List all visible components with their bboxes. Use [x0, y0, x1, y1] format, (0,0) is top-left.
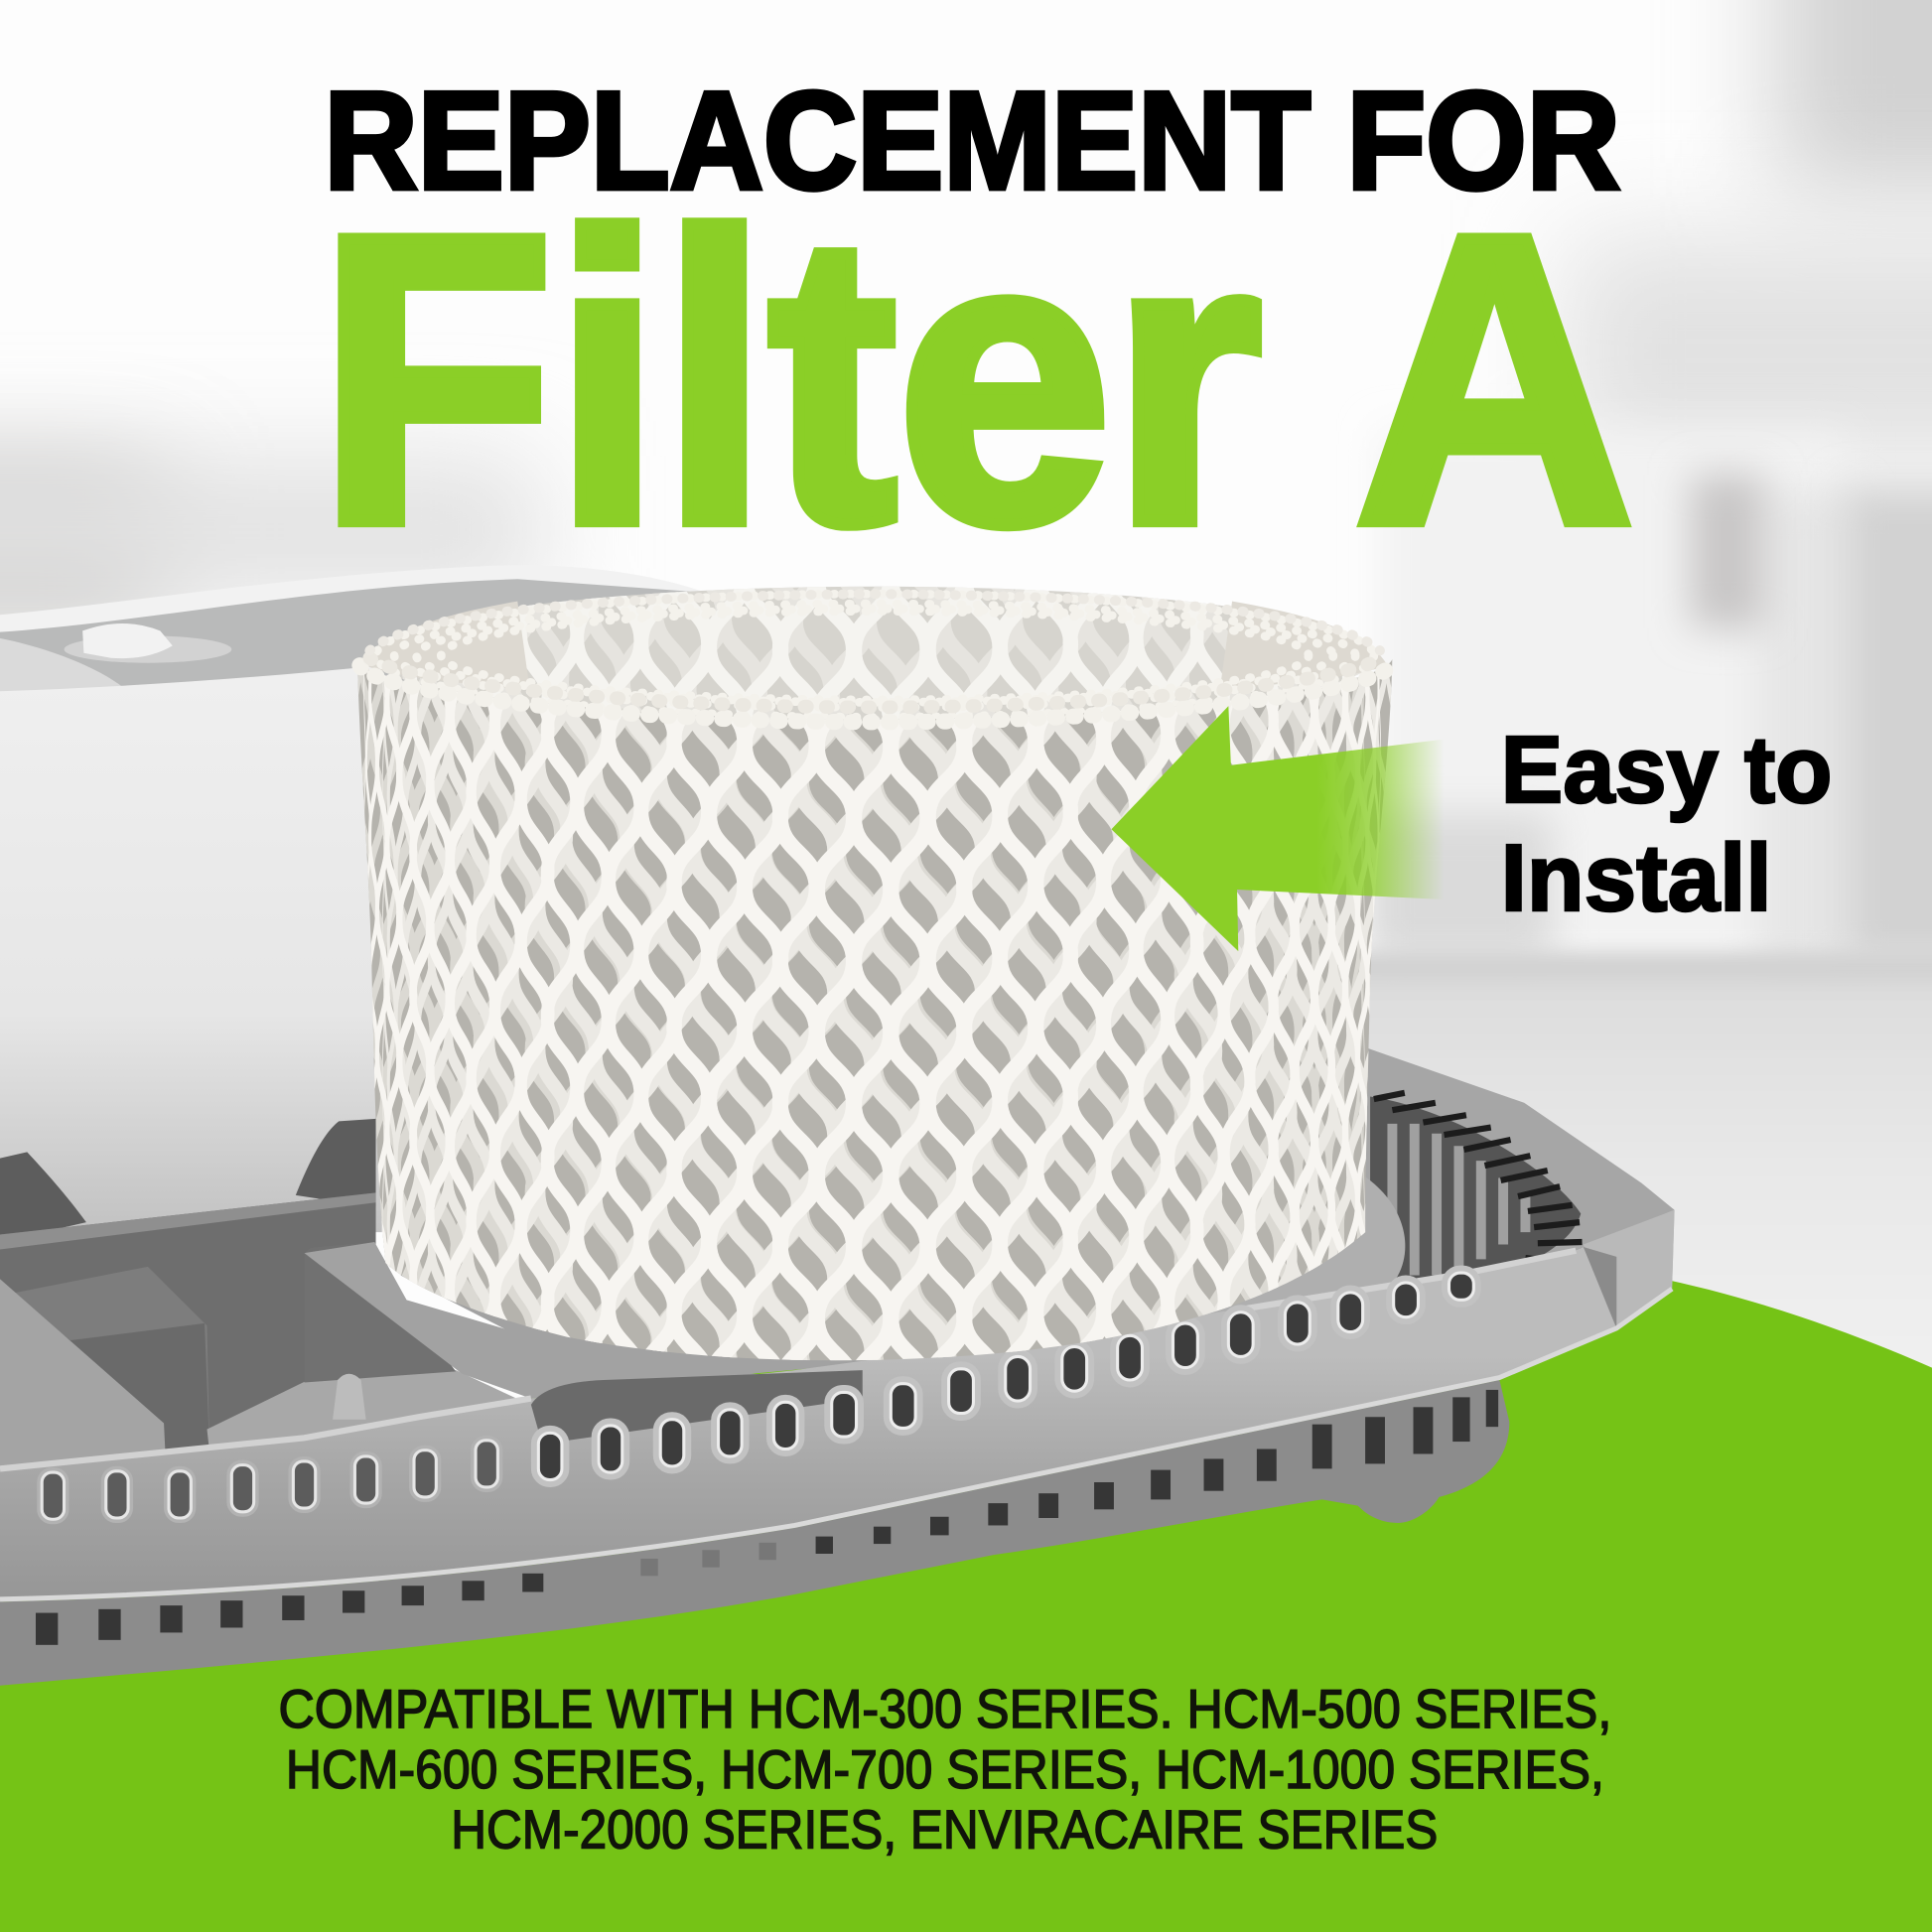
front jagged rim upper row — [369, 658, 1380, 707]
lower skirt — [0, 1380, 1509, 1686]
corner ribbed recess — [1370, 1097, 1581, 1284]
upper slots right loops — [538, 1273, 1473, 1480]
recess vertical ribs — [1392, 1124, 1525, 1276]
tray rear wall — [0, 1192, 376, 1466]
upper slots left loops — [42, 1441, 497, 1519]
post platform — [207, 1370, 530, 1451]
title line 1: REPLACEMENT FOR — [324, 63, 1620, 218]
humidifier body — [0, 565, 702, 1232]
compatibility text: HCM-600 SERIES, HCM-700 SERIES, HCM-1000 SERIES, — [286, 1739, 1604, 1800]
fuzzy ring texture — [376, 594, 1374, 717]
callout: easy to install: Easy to — [1501, 717, 1832, 823]
light wedge — [0, 1279, 167, 1484]
grey tray base — [0, 1046, 1675, 1686]
lower slots row — [36, 1390, 1498, 1645]
back wall — [377, 586, 1361, 720]
title line 2: Filter A — [318, 150, 1634, 609]
under filter fill — [400, 1220, 1355, 1386]
front jagged rim — [359, 665, 1390, 722]
lid knob ring — [65, 635, 231, 663]
lid lip — [0, 565, 702, 635]
left top fuzzy ring — [364, 602, 530, 690]
green curved ground — [0, 1269, 1932, 1932]
recess rim dashes — [1374, 1093, 1583, 1283]
corner wedge — [1584, 1210, 1675, 1330]
rim groove highlight — [0, 1289, 1672, 1599]
back tabs — [0, 1119, 376, 1242]
upper slots left — [42, 1441, 497, 1519]
rim top highlight — [0, 1251, 1576, 1468]
right top fuzzy ring — [1220, 602, 1387, 690]
lid wedge — [0, 638, 123, 692]
upper slots right — [538, 1273, 1473, 1480]
platform left block — [305, 1242, 456, 1382]
compatibility text: COMPATIBLE WITH HCM-300 SERIES. HCM-500 SERIES, — [278, 1679, 1611, 1739]
back jagged rim — [369, 594, 1380, 650]
front rim face — [0, 1210, 1675, 1601]
rear right rim — [1355, 1046, 1675, 1312]
callout: easy to install — [1501, 717, 1832, 931]
install arrow — [1111, 706, 1445, 951]
compatibility text — [278, 1679, 1611, 1861]
platform around filter — [1109, 1176, 1405, 1355]
inner box — [10, 1267, 209, 1453]
filter cylinder — [351, 586, 1393, 1360]
peg — [333, 1374, 366, 1420]
body panel — [0, 665, 382, 1232]
lid knob — [82, 623, 173, 658]
callout: easy to install: Install — [1501, 825, 1772, 931]
front wall — [357, 659, 1392, 1360]
compatibility text: HCM-2000 SERIES, ENVIRACAIRE SERIES — [451, 1800, 1438, 1861]
lid recess — [0, 579, 690, 695]
raised inner lip — [531, 1370, 863, 1445]
